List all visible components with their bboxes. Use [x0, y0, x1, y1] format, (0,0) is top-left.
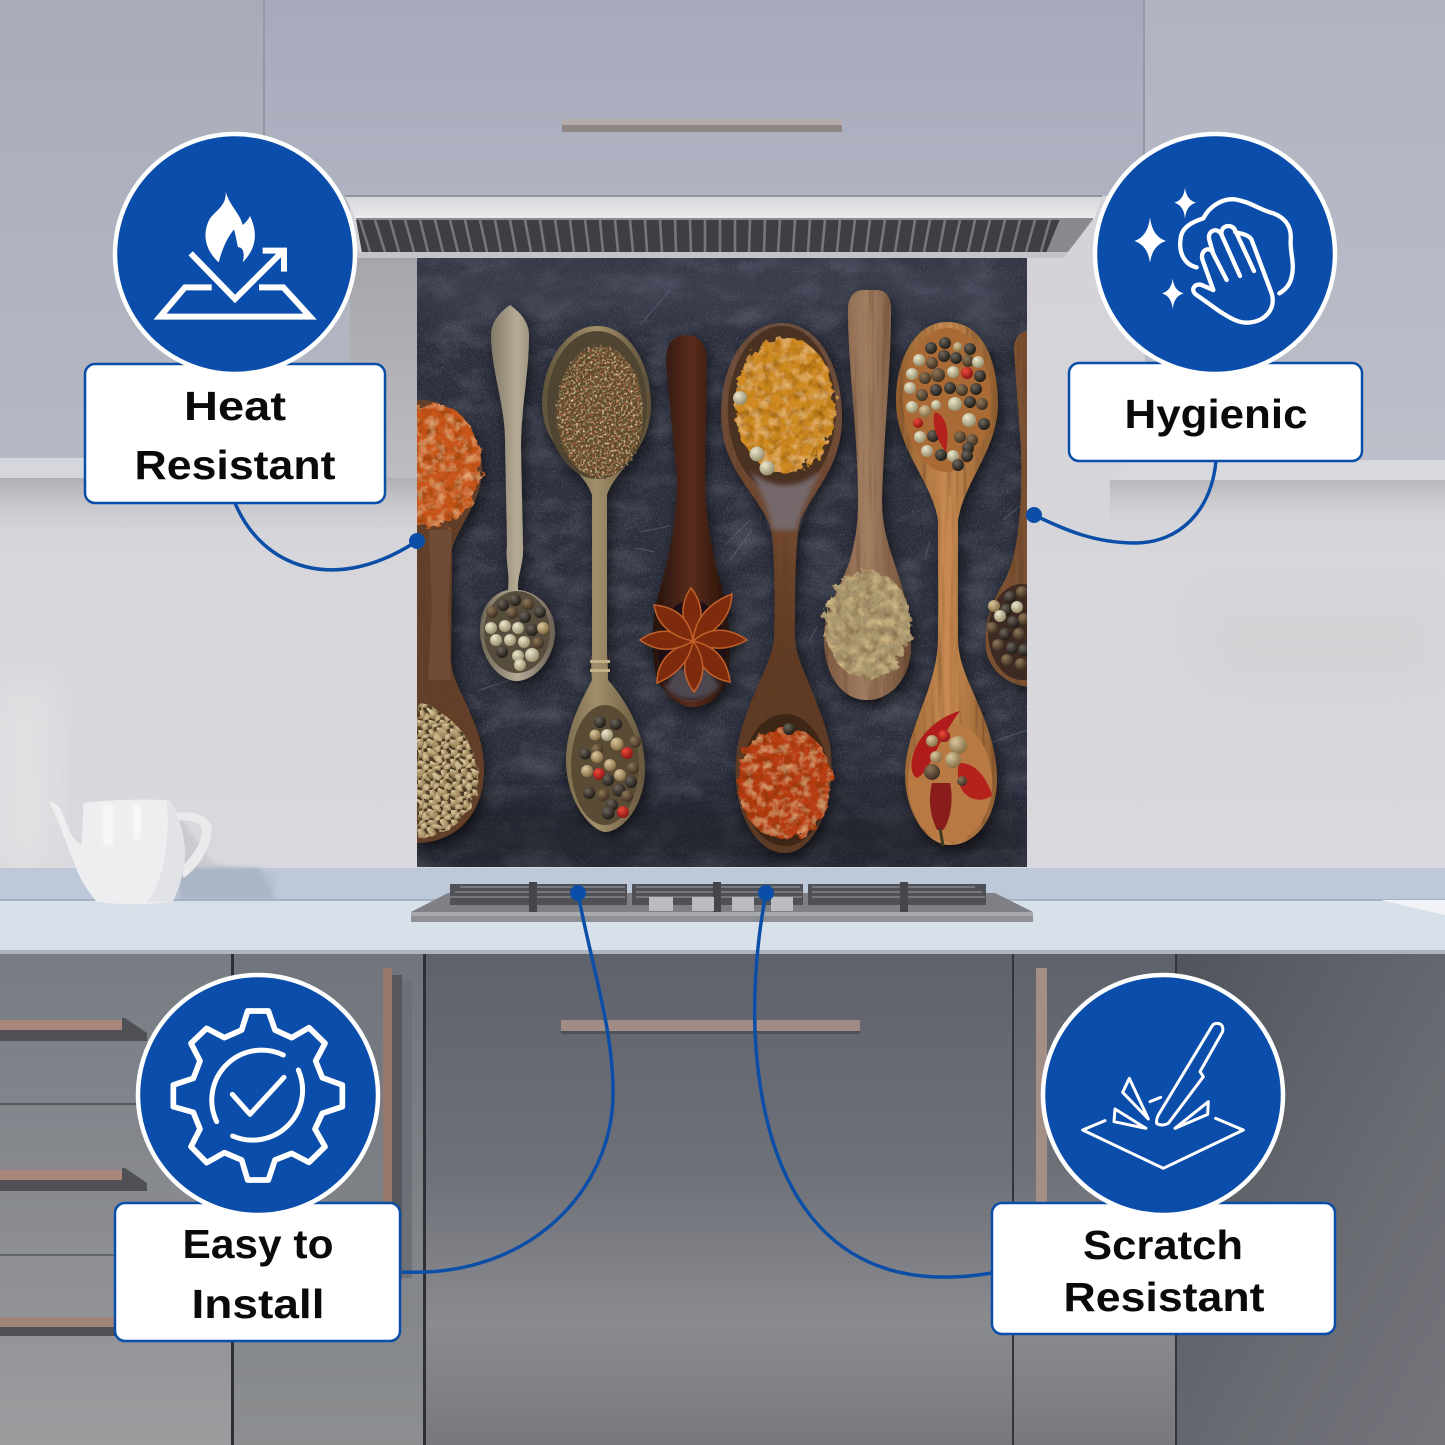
- icon circle: [138, 975, 378, 1215]
- label box: [1069, 363, 1362, 461]
- label text: [1064, 1222, 1265, 1320]
- feature: easy to install: [115, 975, 400, 1341]
- connector: easy to install: [402, 885, 613, 1272]
- feature: scratch resistant: [992, 975, 1335, 1334]
- spoon 3: brass spoon with mixed spice: [542, 326, 651, 832]
- white jug: [48, 800, 277, 904]
- cooktop: [411, 882, 1033, 922]
- feature: heat resistant: [85, 134, 385, 503]
- upper cabinet handle: [562, 119, 842, 132]
- wall shadows: [0, 255, 1445, 870]
- star anise: [640, 588, 747, 692]
- icon circle: [1095, 134, 1335, 374]
- slate background: [417, 258, 1027, 867]
- worktop: [0, 868, 1445, 954]
- upper cabinets: [0, 0, 1445, 480]
- icon: gear with check mark: [173, 1011, 342, 1180]
- label text: Resistant: [1064, 1274, 1265, 1320]
- spoon 4: dark wood with star anise: [640, 335, 747, 707]
- icon: knife scratching surface: [1083, 1023, 1243, 1168]
- spoon 5: turmeric and chilli powder: [721, 323, 842, 853]
- splashback panel: spice spoons: [383, 258, 1056, 867]
- icon: hand wiping with sparkles: [1134, 188, 1293, 323]
- feature: hygienic: [1069, 134, 1362, 461]
- label box: [85, 364, 385, 503]
- base cabinets: [0, 954, 1445, 1445]
- label text: Scratch: [1083, 1222, 1243, 1268]
- label box: [992, 1203, 1335, 1334]
- spoon 8: cropped spoon with peppercorns: [982, 331, 1027, 696]
- label text: Easy to: [182, 1221, 334, 1267]
- label text: [182, 1221, 334, 1327]
- connector: heat resistant: [235, 503, 425, 570]
- connector: scratch resistant: [755, 885, 992, 1277]
- spoon 7: peppercorns and chillies: [896, 322, 998, 846]
- label text: [134, 383, 336, 488]
- chillies: [911, 711, 992, 846]
- icon: flame on surface with arrow: [160, 192, 310, 317]
- icon circle: [115, 134, 355, 374]
- cooker hood: [345, 195, 1102, 258]
- label box: [115, 1203, 400, 1341]
- spoon 1: paprika and coriander: [417, 400, 494, 852]
- spoon 6: pale wood with ground spice: [824, 290, 911, 700]
- label text: Resistant: [134, 442, 336, 488]
- label text: Install: [192, 1281, 324, 1327]
- connector: hygienic: [1026, 460, 1216, 543]
- label text: Hygienic: [1124, 391, 1308, 437]
- spoon 2: small silver spoon with peppercorns: [480, 305, 555, 681]
- label text: Heat: [184, 383, 286, 429]
- icon circle: [1043, 975, 1283, 1215]
